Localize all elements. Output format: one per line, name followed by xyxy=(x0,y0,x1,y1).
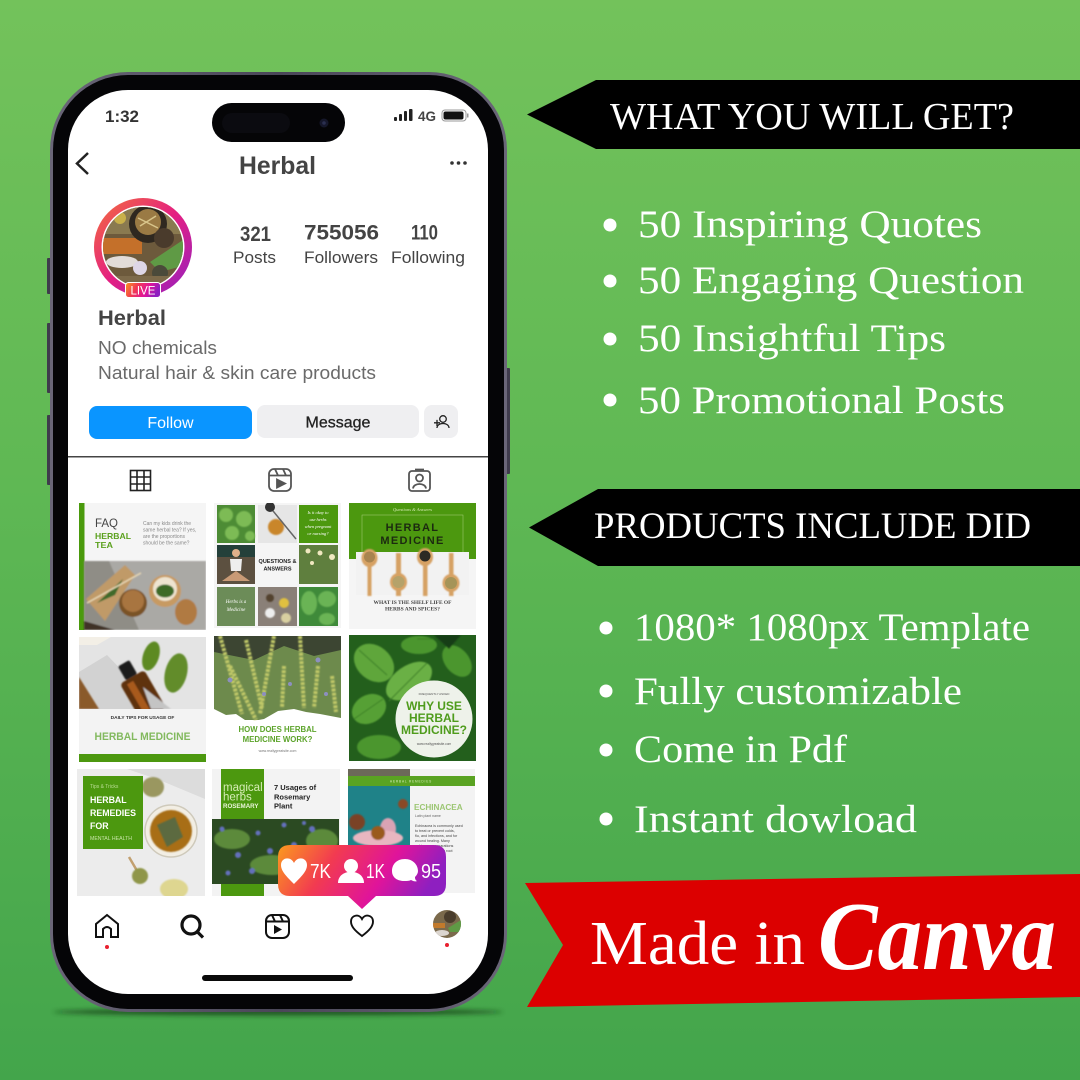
phone mockup xyxy=(47,72,510,1012)
post: herbal remedies: Tips & Tricks xyxy=(90,784,119,790)
post: echinacea xyxy=(348,769,475,893)
post: questions and answers collage: use herbs xyxy=(309,517,327,522)
post: herbal medicine spoons: Questions & Answers xyxy=(393,507,432,512)
bullet: pdf: Come in Pdf xyxy=(634,728,847,771)
post: rosemary: Rosemary xyxy=(274,792,311,802)
profile avatar: LIVE xyxy=(131,286,156,298)
icon: reels xyxy=(266,915,289,938)
post: questions and answers collage: QUESTIONS & xyxy=(259,559,296,565)
post: herbal medicine spoons: HERBS AND SPICES? xyxy=(385,606,440,612)
post: echinacea: ECHINACEA xyxy=(414,803,463,812)
notification popup xyxy=(278,845,446,909)
profile header xyxy=(77,152,467,180)
post: questions and answers collage: Medicine xyxy=(226,608,246,613)
phone shadow xyxy=(53,1008,503,1016)
post: rosemary: ROSEMARY xyxy=(223,803,259,810)
bullet: question: 50 Engaging Question xyxy=(638,259,1024,302)
post grid xyxy=(77,502,478,899)
post: FAQ herbal tea: HERBAL xyxy=(95,531,131,541)
icon: heart xyxy=(281,858,307,884)
post: FAQ herbal tea: Can my kids drink the xyxy=(143,521,191,527)
bullet: download: Instant dowload xyxy=(634,798,918,841)
phone body xyxy=(50,72,507,1012)
post: herbal remedies: FOR xyxy=(90,821,109,831)
dynamic island xyxy=(212,103,345,142)
post: why use herbal medicine: MEDICINE? xyxy=(401,723,467,737)
status bar: 4G xyxy=(418,109,436,124)
banner: products include: PRODUCTS INCLUDE DID xyxy=(594,506,1031,547)
post: herbal remedies: REMEDIES xyxy=(90,808,136,818)
post: echinacea: flu, and infections, and for xyxy=(415,834,458,838)
bullet: template size: 1080* 1080px Template xyxy=(634,606,1030,649)
post: herbal remedies: MENTAL HEALTH xyxy=(90,836,132,842)
comment count: 95 xyxy=(421,861,441,883)
post: FAQ herbal tea: same herbal tea? If yes, xyxy=(143,528,196,534)
add friend button xyxy=(424,405,458,438)
post: FAQ herbal tea xyxy=(79,503,206,630)
post: herbal remedies xyxy=(77,769,205,896)
post: questions and answers collage: Herbs is a xyxy=(225,600,247,605)
follow button: Follow xyxy=(147,415,194,432)
profile nav avatar xyxy=(433,910,461,947)
post: daily tips: HERBAL MEDICINE xyxy=(94,731,190,743)
post: echinacea: wound healing. Many xyxy=(415,839,450,843)
post: echinacea: Latin plant name xyxy=(415,814,441,818)
list: products include xyxy=(600,606,1030,841)
profile bio: NO chemicals xyxy=(98,337,217,358)
post: FAQ herbal tea: TEA xyxy=(95,540,113,550)
post: how does herbal medicine work: HOW DOES HERBAL xyxy=(239,725,317,734)
post: why use herbal medicine xyxy=(349,635,476,761)
profile header: Herbal xyxy=(239,152,316,180)
list: what you will get xyxy=(604,203,1024,422)
ribbon: made in canva: Made in xyxy=(590,910,805,978)
icon: grid xyxy=(130,470,150,490)
post: why use herbal medicine: WHY USE xyxy=(406,699,462,713)
post: echinacea: echinacea preparations xyxy=(415,844,453,848)
icon: comment xyxy=(392,859,418,881)
banner: products include xyxy=(529,489,1080,566)
post: FAQ herbal tea: should be the same? xyxy=(143,540,190,546)
add friend button: + xyxy=(433,416,441,430)
post: echinacea: are made from the root xyxy=(415,849,453,853)
icon: person xyxy=(338,859,364,883)
banner: what you will get: WHAT YOU WILL GET? xyxy=(610,96,1014,138)
ribbon: made in canva: Canva xyxy=(818,883,1056,991)
profile stats xyxy=(233,222,465,267)
message button: Message xyxy=(306,414,371,432)
ribbon: made in canva xyxy=(525,874,1080,1007)
profile bio: Natural hair & skin care products xyxy=(98,362,376,383)
profile avatar xyxy=(94,198,192,298)
post: herbal medicine spoons: MEDICINE xyxy=(380,535,445,547)
icon: reels tab xyxy=(269,469,291,491)
profile stats: 110 xyxy=(411,222,438,244)
bullet: tips: 50 Insightful Tips xyxy=(638,317,946,360)
home indicator xyxy=(202,975,353,981)
profile stats: Followers xyxy=(304,249,378,267)
icon: search xyxy=(182,916,203,938)
post: herbal medicine spoons xyxy=(349,503,476,629)
post: daily tips xyxy=(79,637,206,762)
banner: what you will get xyxy=(527,80,1080,149)
post: questions and answers collage: ANSWERS xyxy=(263,566,292,572)
post: echinacea: to treat or prevent colds, xyxy=(415,829,455,833)
post: questions and answers collage: or nursing? xyxy=(307,531,329,536)
post: rosemary: 7 Usages of xyxy=(274,783,317,792)
post: rosemary xyxy=(212,769,340,896)
post: questions and answers collage: Is it okay to xyxy=(306,510,329,515)
post: FAQ herbal tea: FAQ xyxy=(95,516,118,530)
tab icons xyxy=(130,469,430,491)
profile stats: Following xyxy=(391,249,465,267)
status bar: 1:32 xyxy=(105,108,139,126)
follow button xyxy=(89,406,252,439)
post: rosemary: Plant xyxy=(274,802,293,810)
icon: heart nav xyxy=(351,916,373,936)
icon: home xyxy=(96,915,118,949)
bottom navigation xyxy=(96,910,461,981)
post: why use herbal medicine: FREQUENTLY ASKED xyxy=(419,692,450,696)
post: how does herbal medicine work xyxy=(214,636,341,753)
post: FAQ herbal tea: are the proportions xyxy=(143,534,185,540)
post: how does herbal medicine work: MEDICINE WORK? xyxy=(243,735,313,744)
post: rosemary: magical xyxy=(223,782,263,794)
bullet: promotional posts: 50 Promotional Posts xyxy=(638,379,1005,422)
post: questions and answers collage: when pregnant xyxy=(305,524,332,529)
message button xyxy=(257,405,419,438)
profile stats: 755056 xyxy=(304,222,379,244)
icon: tagged tab xyxy=(409,470,430,491)
bullet: customizable: Fully customizable xyxy=(634,670,962,713)
follower count: 1K xyxy=(366,861,386,883)
post: echinacea: Echinacea is commonly used xyxy=(415,824,463,828)
post: herbal medicine spoons: WHAT IS THE SHELF LIFE OF xyxy=(374,600,452,606)
post: herbal remedies: HERBAL xyxy=(90,795,127,805)
post: herbal medicine spoons: HERBAL xyxy=(386,522,439,534)
profile bio xyxy=(98,307,376,383)
post: questions and answers collage xyxy=(214,503,341,628)
post: echinacea: HERBAL REMEDIES xyxy=(390,780,432,784)
status bar xyxy=(105,108,468,126)
like count: 7K xyxy=(310,861,332,883)
phone screen xyxy=(68,90,488,994)
post: daily tips: DAILY TIPS FOR USAGE OF xyxy=(111,715,174,721)
profile stats: Posts xyxy=(233,249,276,267)
profile bio: Herbal xyxy=(98,307,166,330)
bullet: quotes: 50 Inspiring Quotes xyxy=(638,203,982,246)
post: rosemary: herbs xyxy=(223,792,252,804)
post: how does herbal medicine work: www.reallygreatsite.com xyxy=(259,749,296,753)
profile stats: 321 xyxy=(240,223,271,246)
phone side buttons xyxy=(47,258,510,485)
post: why use herbal medicine: www.reallygreatsite.com xyxy=(417,742,452,746)
post: why use herbal medicine: HERBAL xyxy=(409,711,459,725)
